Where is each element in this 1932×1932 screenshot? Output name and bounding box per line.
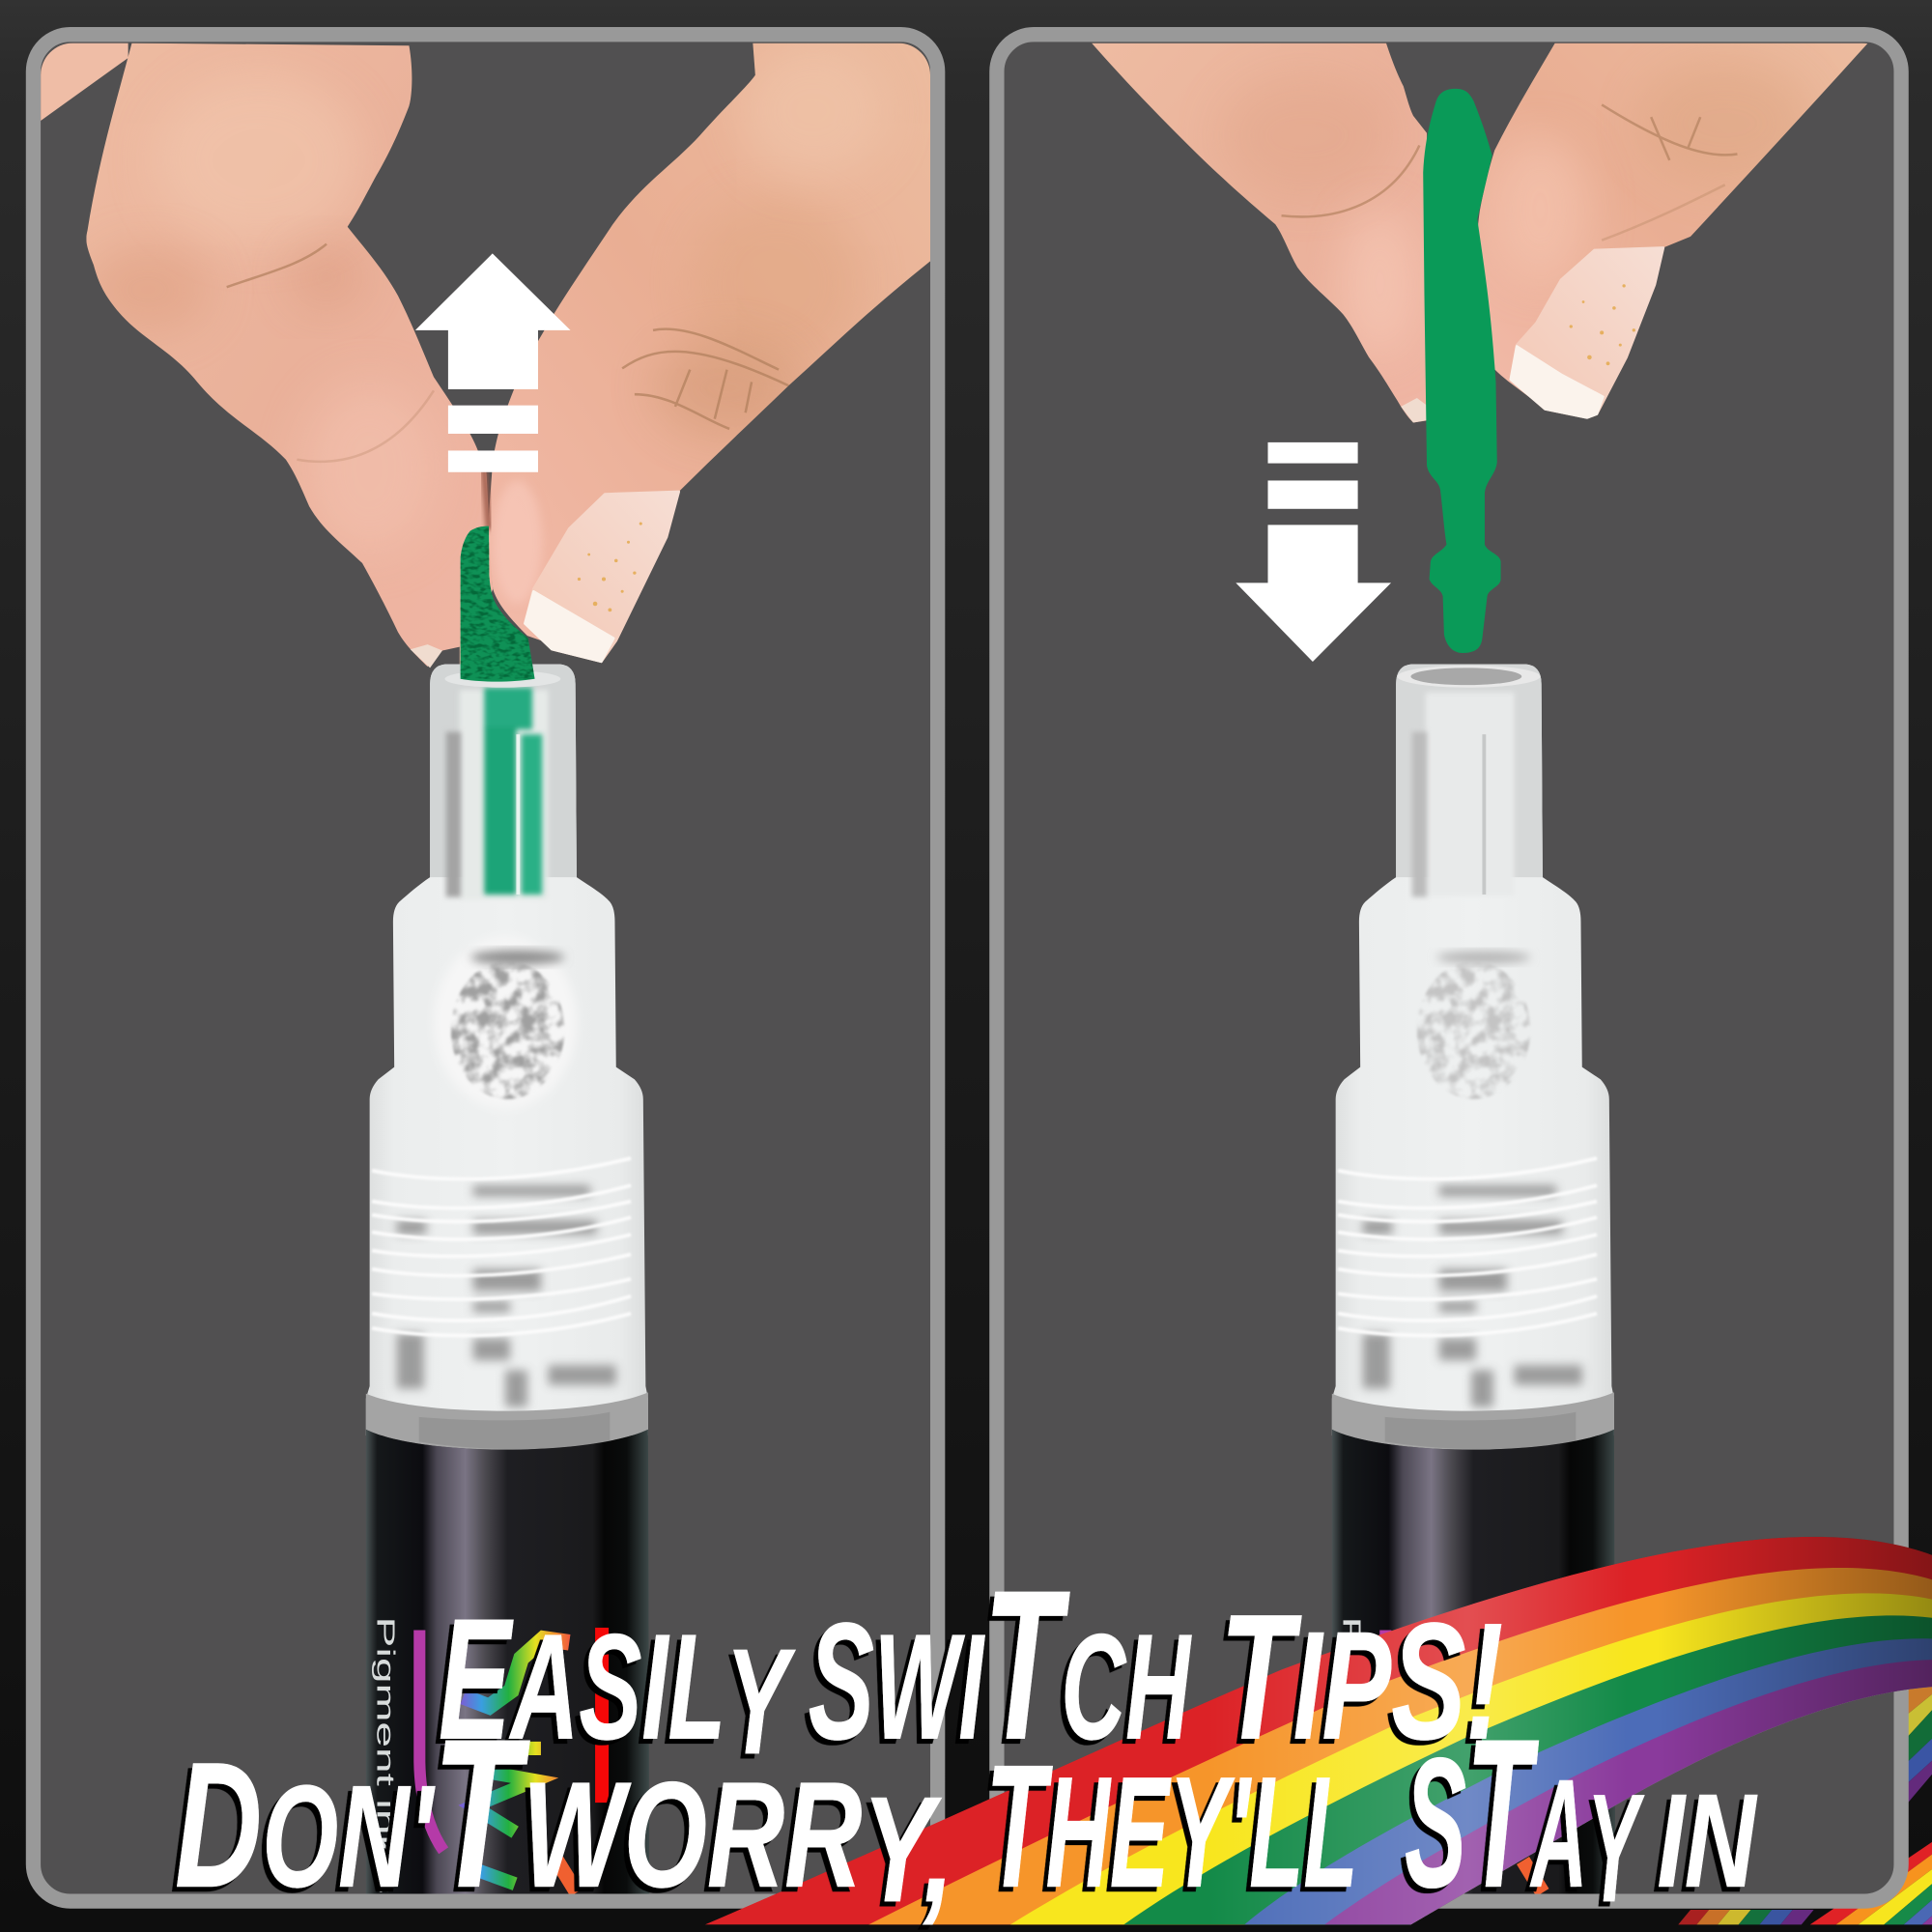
green replacement tip: [1423, 89, 1501, 653]
title word: in: IN: [1658, 1767, 1757, 1916]
nail thumb: [525, 492, 679, 662]
title word: Worry,: Y,: [862, 1765, 953, 1932]
rainbow ribbon tail behind panels: [1678, 1687, 1932, 1924]
panel frame right: [997, 35, 1901, 1901]
title: easily switch tips, don't worry they'll stay in: [175, 1546, 1757, 1932]
hand: right fingers: [1084, 37, 1873, 431]
green tip inside cap: [484, 688, 542, 895]
collar band: [366, 1392, 648, 1450]
nail thumb right: [1511, 247, 1663, 417]
title word: Worry,: WORR: [523, 1750, 998, 1918]
hand: left fingers: [41, 37, 936, 690]
title word: Easily: Y: [725, 1617, 796, 1785]
title word: Easily: EASIL: [439, 1582, 853, 1776]
rainbow ribbon: [705, 1528, 1932, 1932]
thread blotches: [397, 1185, 616, 1407]
title word: Don't: DON'T: [175, 1695, 530, 1932]
panel frame left: [33, 35, 938, 1901]
title word: They'll: THEY'LL: [985, 1729, 1358, 1924]
title word: Stay: Y: [1587, 1762, 1645, 1932]
cap rim: [444, 670, 560, 688]
marker label text: Pigment ink s: [371, 1616, 399, 1894]
green tip in fingers: [461, 526, 535, 682]
thread lines: [372, 1158, 631, 1335]
title word: Tips!: TIPS!: [1220, 1578, 1503, 1777]
title word: Switch: SWITCH: [809, 1546, 1192, 1784]
nail left finger: [411, 644, 442, 668]
empty pen cap: Pigment ink s: [1337, 1616, 1365, 1894]
marker body: [366, 1430, 649, 1897]
foam reservoir: [439, 960, 573, 1095]
panel: step 2 insert tip: [997, 35, 1901, 1901]
arrow: push tip down: [1236, 442, 1391, 662]
empty pen cap: [1332, 665, 1615, 1897]
marker logo: [419, 1628, 609, 1892]
title word: Stay: STA: [1405, 1695, 1642, 1932]
panel: step 1 remove tip: [33, 35, 938, 1901]
arrow: pull tip up: [415, 253, 571, 472]
pen cap: translucent tip holder: [366, 665, 648, 1450]
